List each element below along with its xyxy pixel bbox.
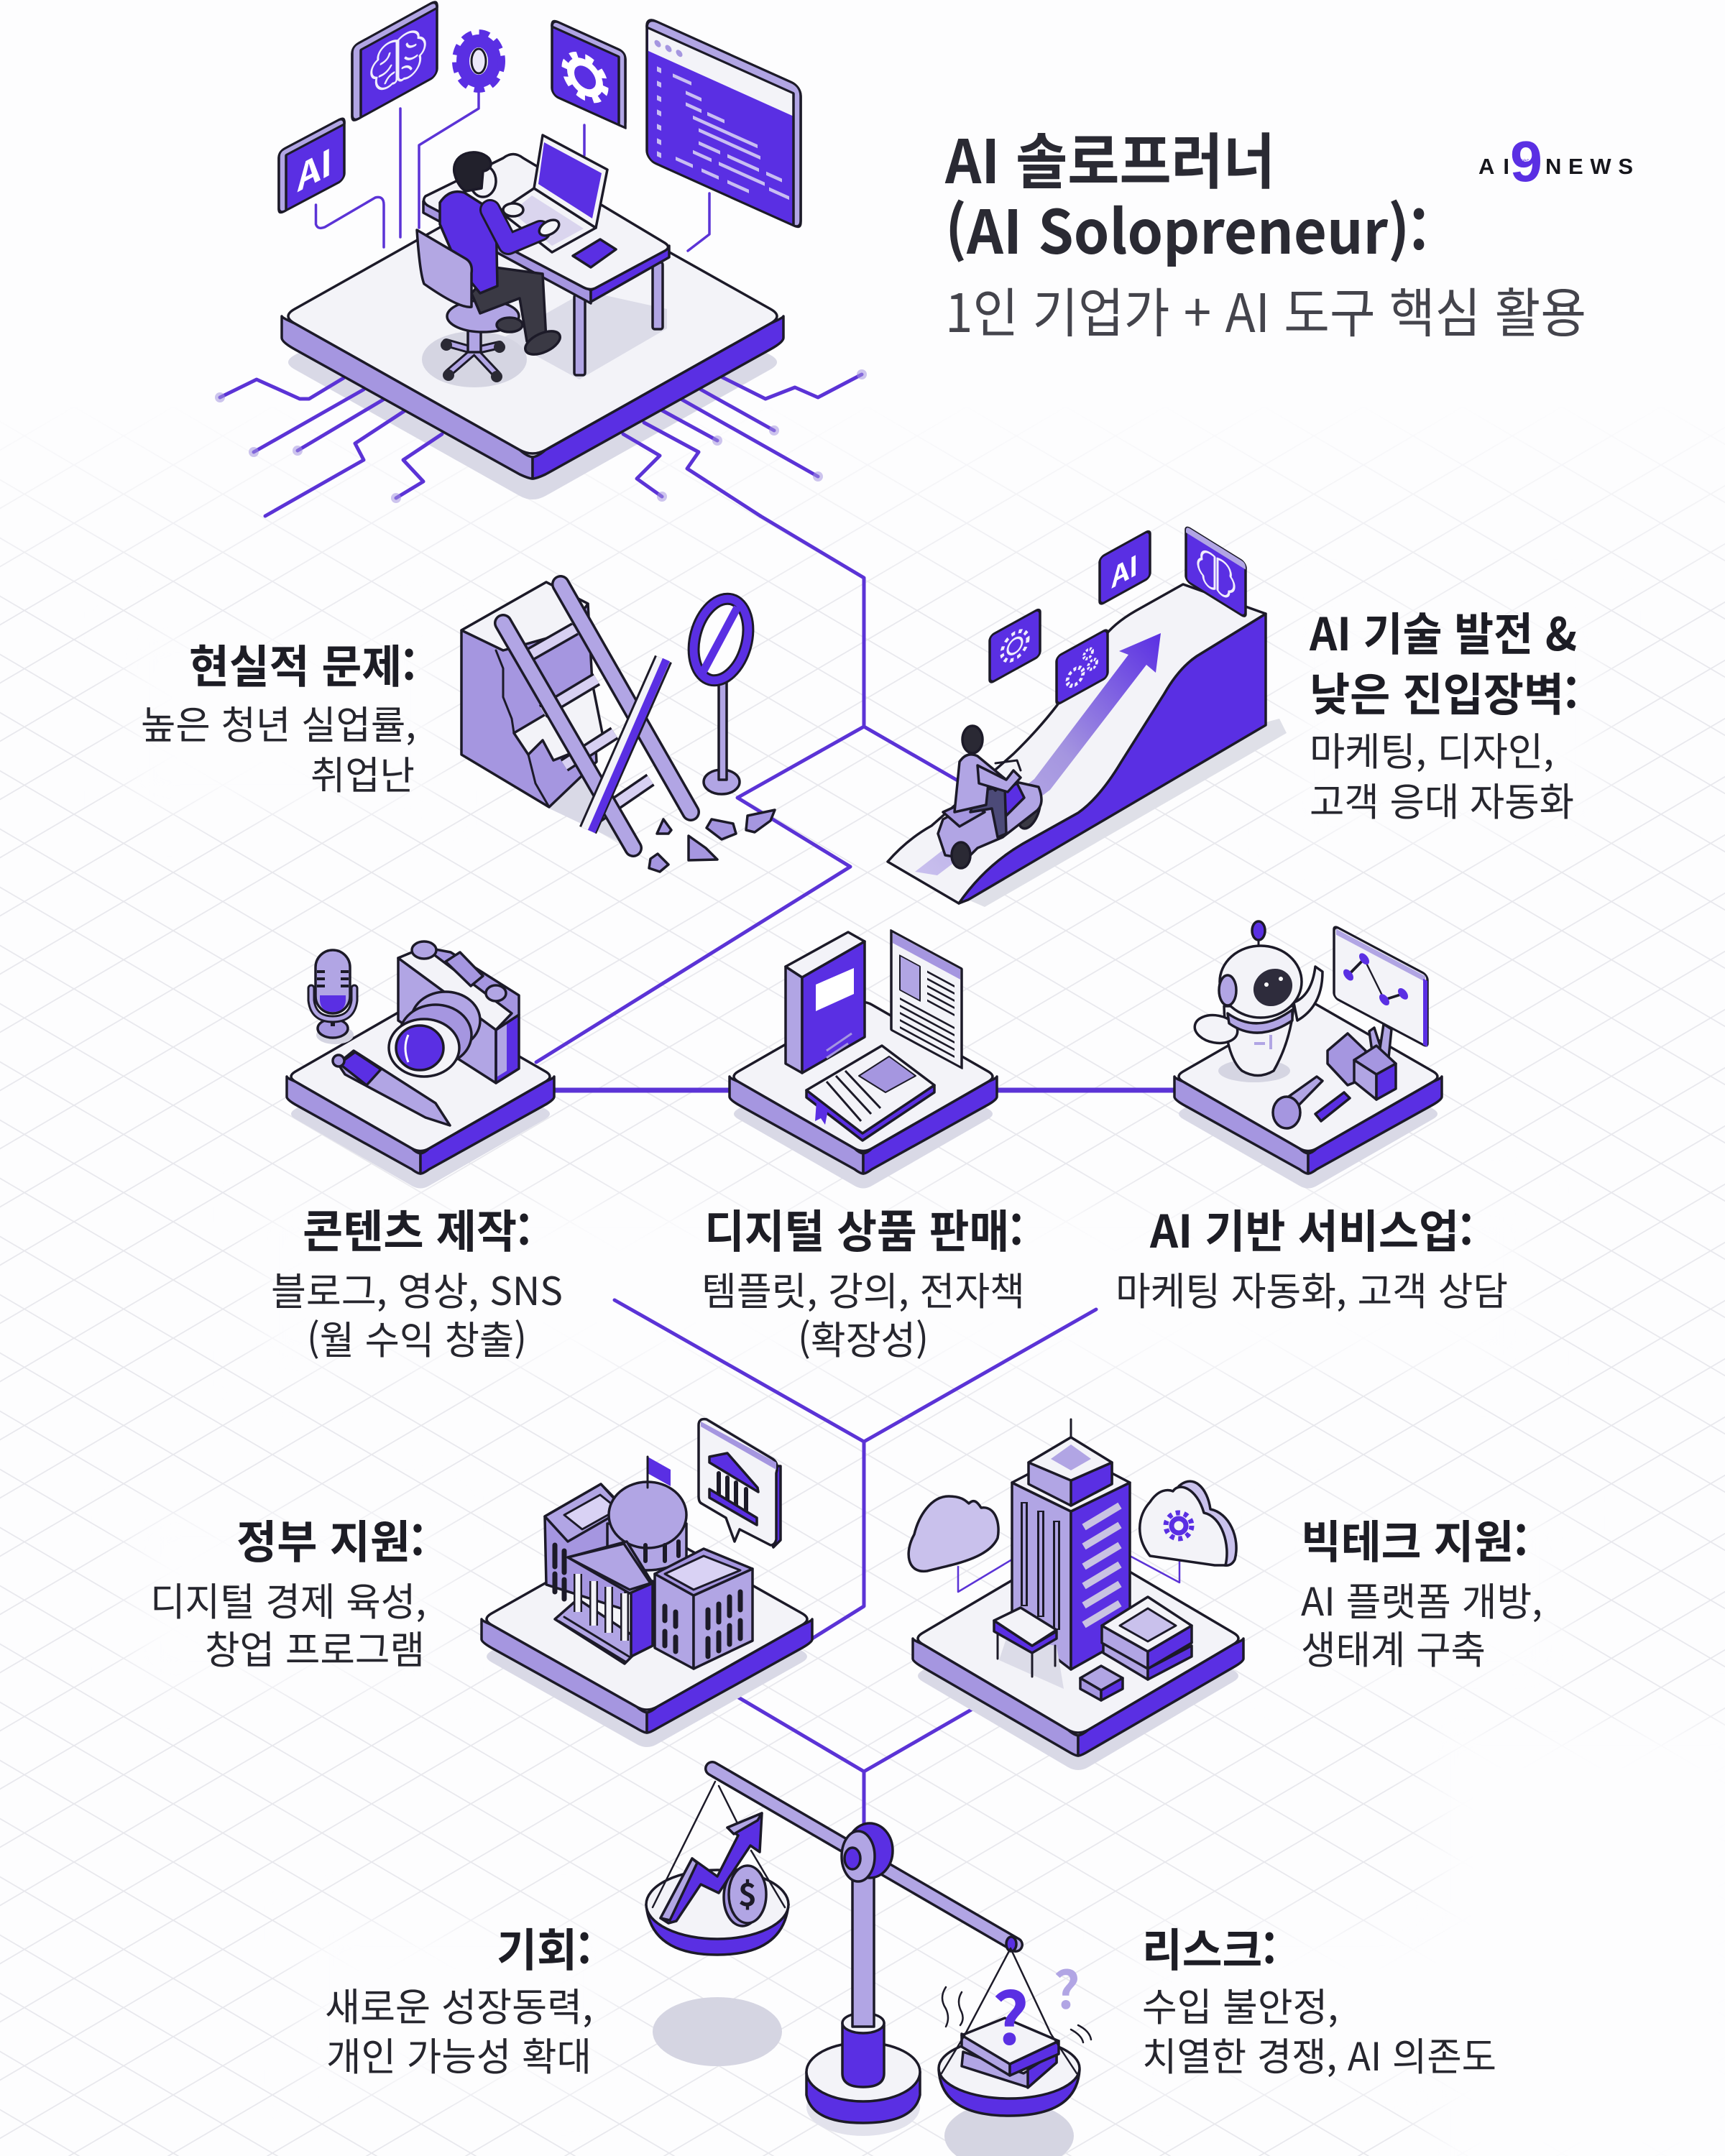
text: AI services: 마케팅 자동화, 고객 상담 bbox=[1116, 1260, 1508, 1317]
connector lines bbox=[536, 516, 1174, 1833]
platform bbox=[287, 1002, 554, 1189]
text: AI tech and low barriers bbox=[1309, 599, 1578, 827]
logo: AI 9 NEWS bbox=[1478, 129, 1633, 193]
logo: AI 9 NEWS: sec bbox=[1520, 157, 1529, 164]
desk bbox=[423, 154, 669, 379]
icon: code window bbox=[647, 17, 801, 229]
icon: table and boxes bbox=[994, 1597, 1192, 1700]
rubble bbox=[649, 810, 775, 872]
text: opportunity: 기회: bbox=[497, 1915, 592, 1980]
logo: AI 9 NEWS: NEWS bbox=[1545, 154, 1633, 179]
text: digital goods: 템플릿, 강의, 전자책 bbox=[702, 1260, 1025, 1317]
right pan: risk: ? bbox=[1053, 1948, 1080, 2024]
text: content creation: 블로그, 영상, SNS bbox=[271, 1260, 563, 1317]
text: digital goods: 디지털 상품 판매: bbox=[704, 1196, 1024, 1261]
right pan: risk: ? bbox=[992, 1961, 1029, 2065]
title: AI 솔로프러너 bbox=[944, 114, 1275, 201]
circuit traces bbox=[215, 369, 867, 516]
text: realistic problem: 취업난 bbox=[310, 744, 415, 801]
text: realistic problem: 현실적 문제: bbox=[189, 631, 416, 696]
floating link lines bbox=[316, 92, 709, 251]
base platform bbox=[282, 179, 783, 479]
left pan: opportunity: $ bbox=[738, 1869, 757, 1915]
beam bbox=[712, 1769, 1016, 1951]
panel: AI services platform bbox=[1174, 921, 1442, 1189]
illustration: scooter climbing ramp bbox=[888, 526, 1287, 907]
text: big tech support: 생태계 구축 bbox=[1301, 1618, 1486, 1675]
icon: pencil cup and clips bbox=[1273, 1024, 1396, 1128]
text: opportunity: 개인 가능성 확대 bbox=[326, 2025, 592, 2082]
icon: AI card: AI bbox=[297, 133, 332, 203]
icon: open book bbox=[806, 1046, 934, 1141]
text: AI tech and low barriers: AI 기술 발전 & bbox=[1309, 599, 1577, 664]
text: big tech support: AI 플랫폼 개방, bbox=[1301, 1570, 1542, 1627]
platform bbox=[482, 1529, 812, 1747]
icon: government building bbox=[545, 1457, 753, 1669]
text: AI tech and low barriers: 마케팅, 디자인, bbox=[1310, 720, 1554, 777]
text: content creation bbox=[271, 1196, 563, 1365]
icon: newspaper bbox=[891, 931, 962, 1068]
illustration: broken ladder and stop sign bbox=[461, 582, 775, 872]
logo: AI 9 NEWS: 9 bbox=[1510, 129, 1542, 193]
text: digital goods: (확장성) bbox=[798, 1309, 929, 1365]
panel: content creation platform bbox=[287, 941, 554, 1189]
icon: tower bbox=[1012, 1419, 1130, 1669]
platform drop shadow bbox=[288, 225, 777, 499]
stand bbox=[806, 1876, 920, 2123]
icon: pen bbox=[333, 1051, 450, 1125]
text: government support: 정부 지원: bbox=[236, 1506, 425, 1572]
icon cards on ramp: AI bbox=[1111, 543, 1138, 597]
text: AI services bbox=[1116, 1196, 1508, 1317]
text: opportunity: 새로운 성장동력, bbox=[325, 1976, 593, 2032]
panel: big tech support platform bbox=[908, 1419, 1243, 1770]
icon: book bbox=[786, 932, 865, 1073]
text: content creation: (월 수익 창출) bbox=[307, 1309, 527, 1365]
platform bbox=[1174, 1002, 1442, 1189]
text: government support: 창업 프로그램 bbox=[205, 1618, 425, 1675]
text: AI tech and low barriers: 고객 응대 자동화 bbox=[1310, 770, 1574, 827]
pivot bbox=[842, 1823, 893, 1881]
icon: chart board bbox=[1334, 926, 1427, 1047]
panel: digital goods platform bbox=[730, 931, 997, 1189]
text: content creation: 콘텐츠 제작: bbox=[303, 1196, 531, 1261]
right pan: risk bbox=[939, 1948, 1091, 2116]
text: big tech support bbox=[1301, 1506, 1542, 1675]
laptop bbox=[500, 135, 607, 252]
icon cards on ramp bbox=[990, 526, 1246, 705]
cloud link lines bbox=[958, 1556, 1179, 1592]
text: realistic problem: 높은 청년 실업률, bbox=[141, 694, 416, 750]
text: government support bbox=[150, 1506, 426, 1675]
icon: right cloud with gear bbox=[1140, 1481, 1236, 1565]
stop sign bbox=[685, 593, 757, 794]
icon: camera bbox=[389, 941, 519, 1083]
left pan: opportunity bbox=[646, 1782, 788, 1955]
icon: left cloud bbox=[908, 1496, 998, 1571]
rider on scooter bbox=[938, 726, 1044, 868]
growth arrow bbox=[915, 633, 1161, 875]
title: (AI Solopreneur): bbox=[945, 185, 1428, 272]
panel: solopreneur desk scene bbox=[215, 0, 867, 516]
title bbox=[944, 114, 1586, 348]
text: risk: 수입 불안정, bbox=[1142, 1976, 1338, 2032]
icon: floating gear bbox=[456, 33, 502, 89]
text: risk: 치열한 경쟁, AI 의존도 bbox=[1142, 2025, 1496, 2082]
icon: robot bbox=[1192, 921, 1322, 1082]
text: AI tech and low barriers: 낮은 진입장벽: bbox=[1310, 659, 1578, 724]
text: government support: 디지털 경제 육성, bbox=[150, 1570, 426, 1627]
text: risk: 리스크: bbox=[1142, 1915, 1276, 1980]
icon: microphone bbox=[311, 950, 354, 1044]
text: risk bbox=[1142, 1915, 1496, 2082]
illustration: balance scale bbox=[646, 1769, 1091, 2156]
ladder bbox=[503, 584, 691, 848]
platform bbox=[730, 1002, 997, 1189]
panel: government support platform bbox=[482, 1419, 812, 1747]
title: 1인 기업가 + AI 도구 핵심 활용 bbox=[945, 271, 1586, 348]
ramp bbox=[888, 584, 1266, 903]
platform bbox=[913, 1544, 1243, 1770]
phone bbox=[573, 239, 616, 267]
text: digital goods bbox=[702, 1196, 1025, 1365]
person at desk bbox=[417, 152, 564, 387]
icon: speech bubble bank bbox=[699, 1419, 781, 1547]
text: AI services: AI 기반 서비스업: bbox=[1149, 1196, 1473, 1261]
ground shadows bbox=[653, 1997, 1074, 2156]
icon: brain card bbox=[352, 0, 437, 122]
text: realistic problem bbox=[141, 631, 416, 801]
icon: AI card bbox=[279, 117, 344, 214]
icon: gear card bbox=[552, 19, 625, 128]
cracked block bbox=[461, 582, 604, 807]
text: opportunity bbox=[325, 1915, 593, 2082]
text: big tech support: 빅테크 지원: bbox=[1301, 1506, 1528, 1572]
logo: AI 9 NEWS: AI bbox=[1478, 154, 1509, 179]
